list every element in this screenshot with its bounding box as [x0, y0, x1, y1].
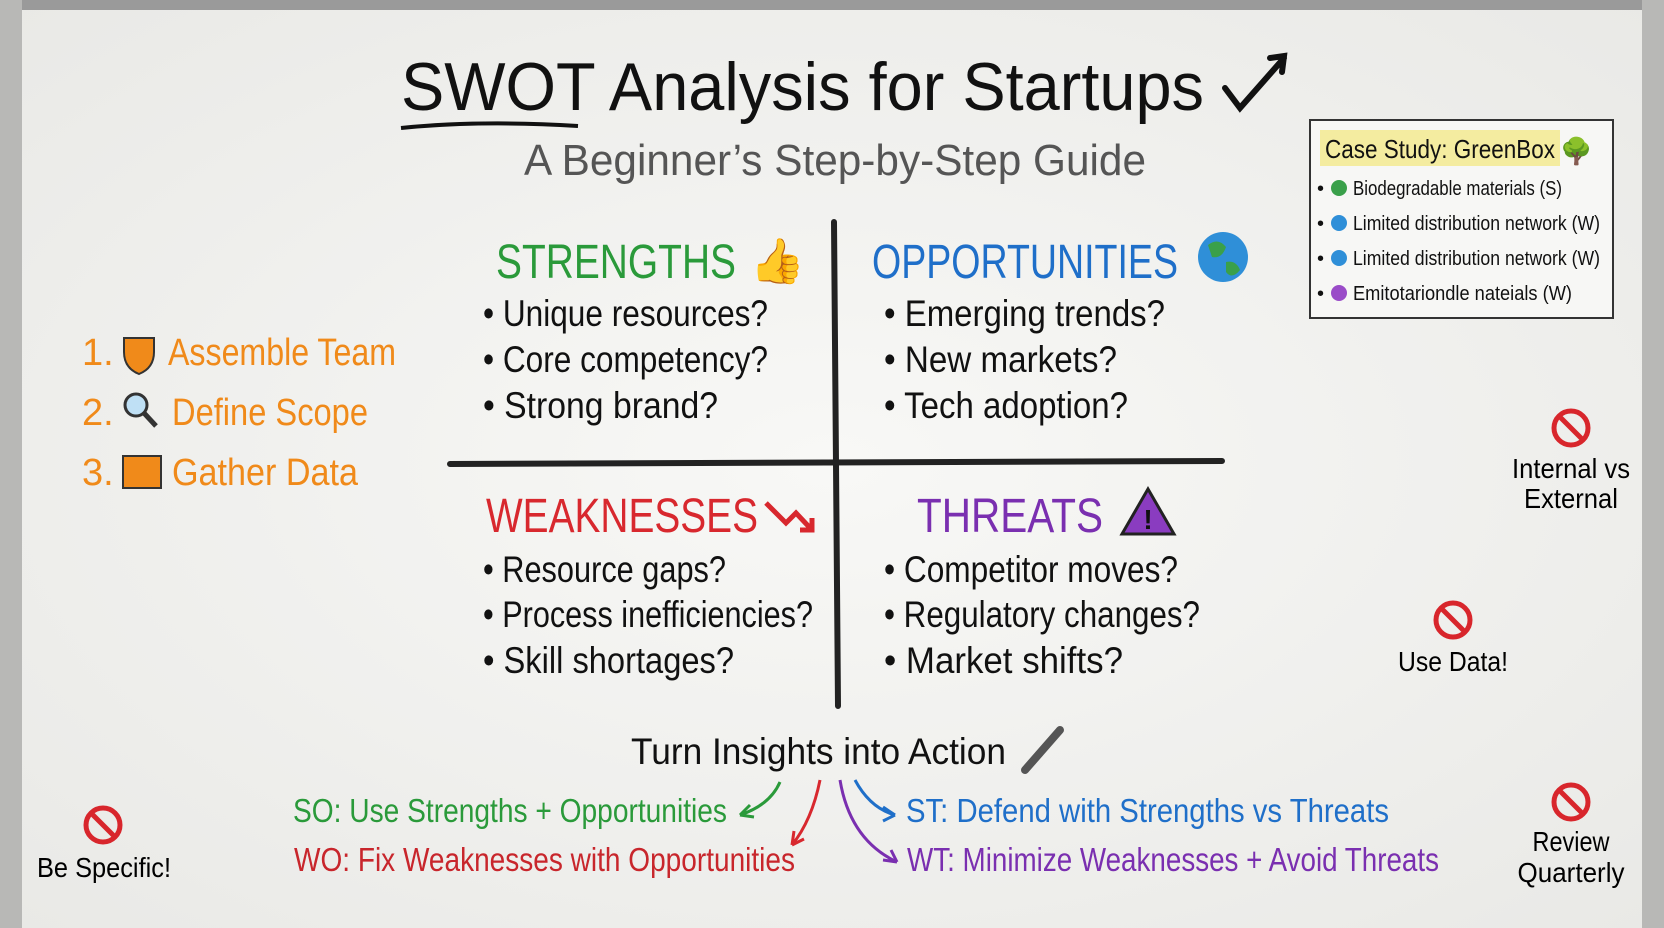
panel: opportunities: • New markets? [884, 339, 1117, 380]
tip: review quarterly: Review [1532, 826, 1610, 857]
panel: strengths: • Unique resources? [483, 293, 768, 334]
tip: review quarterly: Quarterly [1518, 857, 1624, 888]
panel: threats: • Competitor moves? [884, 549, 1178, 590]
strategy ST: ST: Defend with Strengths vs Threats [906, 792, 1389, 829]
title: SWOT Analysis for Startups [401, 49, 1204, 125]
tip: internal vs external: External [1524, 483, 1618, 514]
panel: strengths: STRENGTHS [496, 236, 736, 289]
panel: weaknesses: WEAKNESSES [486, 490, 758, 543]
quadrant grid lines [450, 222, 1222, 706]
case study box: Emitotariondle nateials (W) [1353, 283, 1572, 305]
steps list: 3. [82, 452, 114, 494]
case study box: Biodegradable materials (S) [1353, 178, 1562, 200]
steps list: 2. [82, 392, 114, 434]
panel: threats: • Market shifts? [884, 640, 1123, 681]
panel: opportunities: • Emerging trends? [884, 293, 1165, 334]
case study box: Case Study: GreenBox [1325, 134, 1555, 164]
panel: opportunities [872, 232, 1248, 426]
tip: use data [1398, 603, 1508, 677]
case study box: Limited distribution network (W) [1353, 213, 1600, 235]
panel: weaknesses [483, 490, 813, 681]
case study box [1310, 120, 1613, 318]
tip: review quarterly [1518, 785, 1624, 888]
panel: threats [884, 489, 1200, 681]
strategy WO: WO: Fix Weaknesses with Opportunities [294, 841, 795, 878]
steps list [82, 332, 396, 494]
case study box: • [1317, 248, 1324, 270]
panel: threats: • Regulatory changes? [884, 594, 1200, 635]
case study box: Limited distribution network (W) [1353, 248, 1600, 270]
case study box: • [1317, 178, 1324, 200]
case study box: • [1317, 283, 1324, 305]
panel: strengths: • Strong brand? [483, 385, 718, 426]
strategy SO: SO: Use Strengths + Opportunities [293, 792, 727, 829]
tip: internal vs external [1512, 411, 1630, 514]
tip: use data: Use Data! [1398, 646, 1508, 677]
panel: weaknesses: • Skill shortages? [483, 640, 734, 681]
arrows [740, 780, 897, 862]
steps list: Gather Data [172, 452, 359, 494]
panel: weaknesses: • Process inefficiencies? [483, 594, 813, 635]
panel: strengths: • Core competency? [483, 339, 768, 380]
steps list: 1. [82, 332, 114, 374]
panel: opportunities: • Tech adoption? [884, 385, 1128, 426]
action heading: Turn Insights into Action [631, 731, 1006, 772]
subtitle: A Beginner’s Step-by-Step Guide [524, 136, 1146, 185]
case study box: 🌳 [1560, 135, 1592, 166]
steps list: Define Scope [172, 392, 368, 434]
panel: threats: THREATS [917, 490, 1103, 543]
tip: be specific: Be Specific! [37, 852, 171, 883]
tip: be specific [37, 808, 171, 883]
panel: weaknesses: • Resource gaps? [483, 549, 726, 590]
panel: opportunities: OPPORTUNITIES [872, 236, 1178, 289]
panel: strengths [483, 236, 805, 426]
case study box: • [1317, 213, 1324, 235]
steps list: Assemble Team [168, 332, 396, 374]
panel: threats: ! [1143, 504, 1153, 535]
panel: strengths: 👍 [750, 236, 805, 286]
tip: internal vs external: Internal vs [1512, 453, 1630, 484]
strategy WT: WT: Minimize Weaknesses + Avoid Threats [907, 841, 1439, 878]
